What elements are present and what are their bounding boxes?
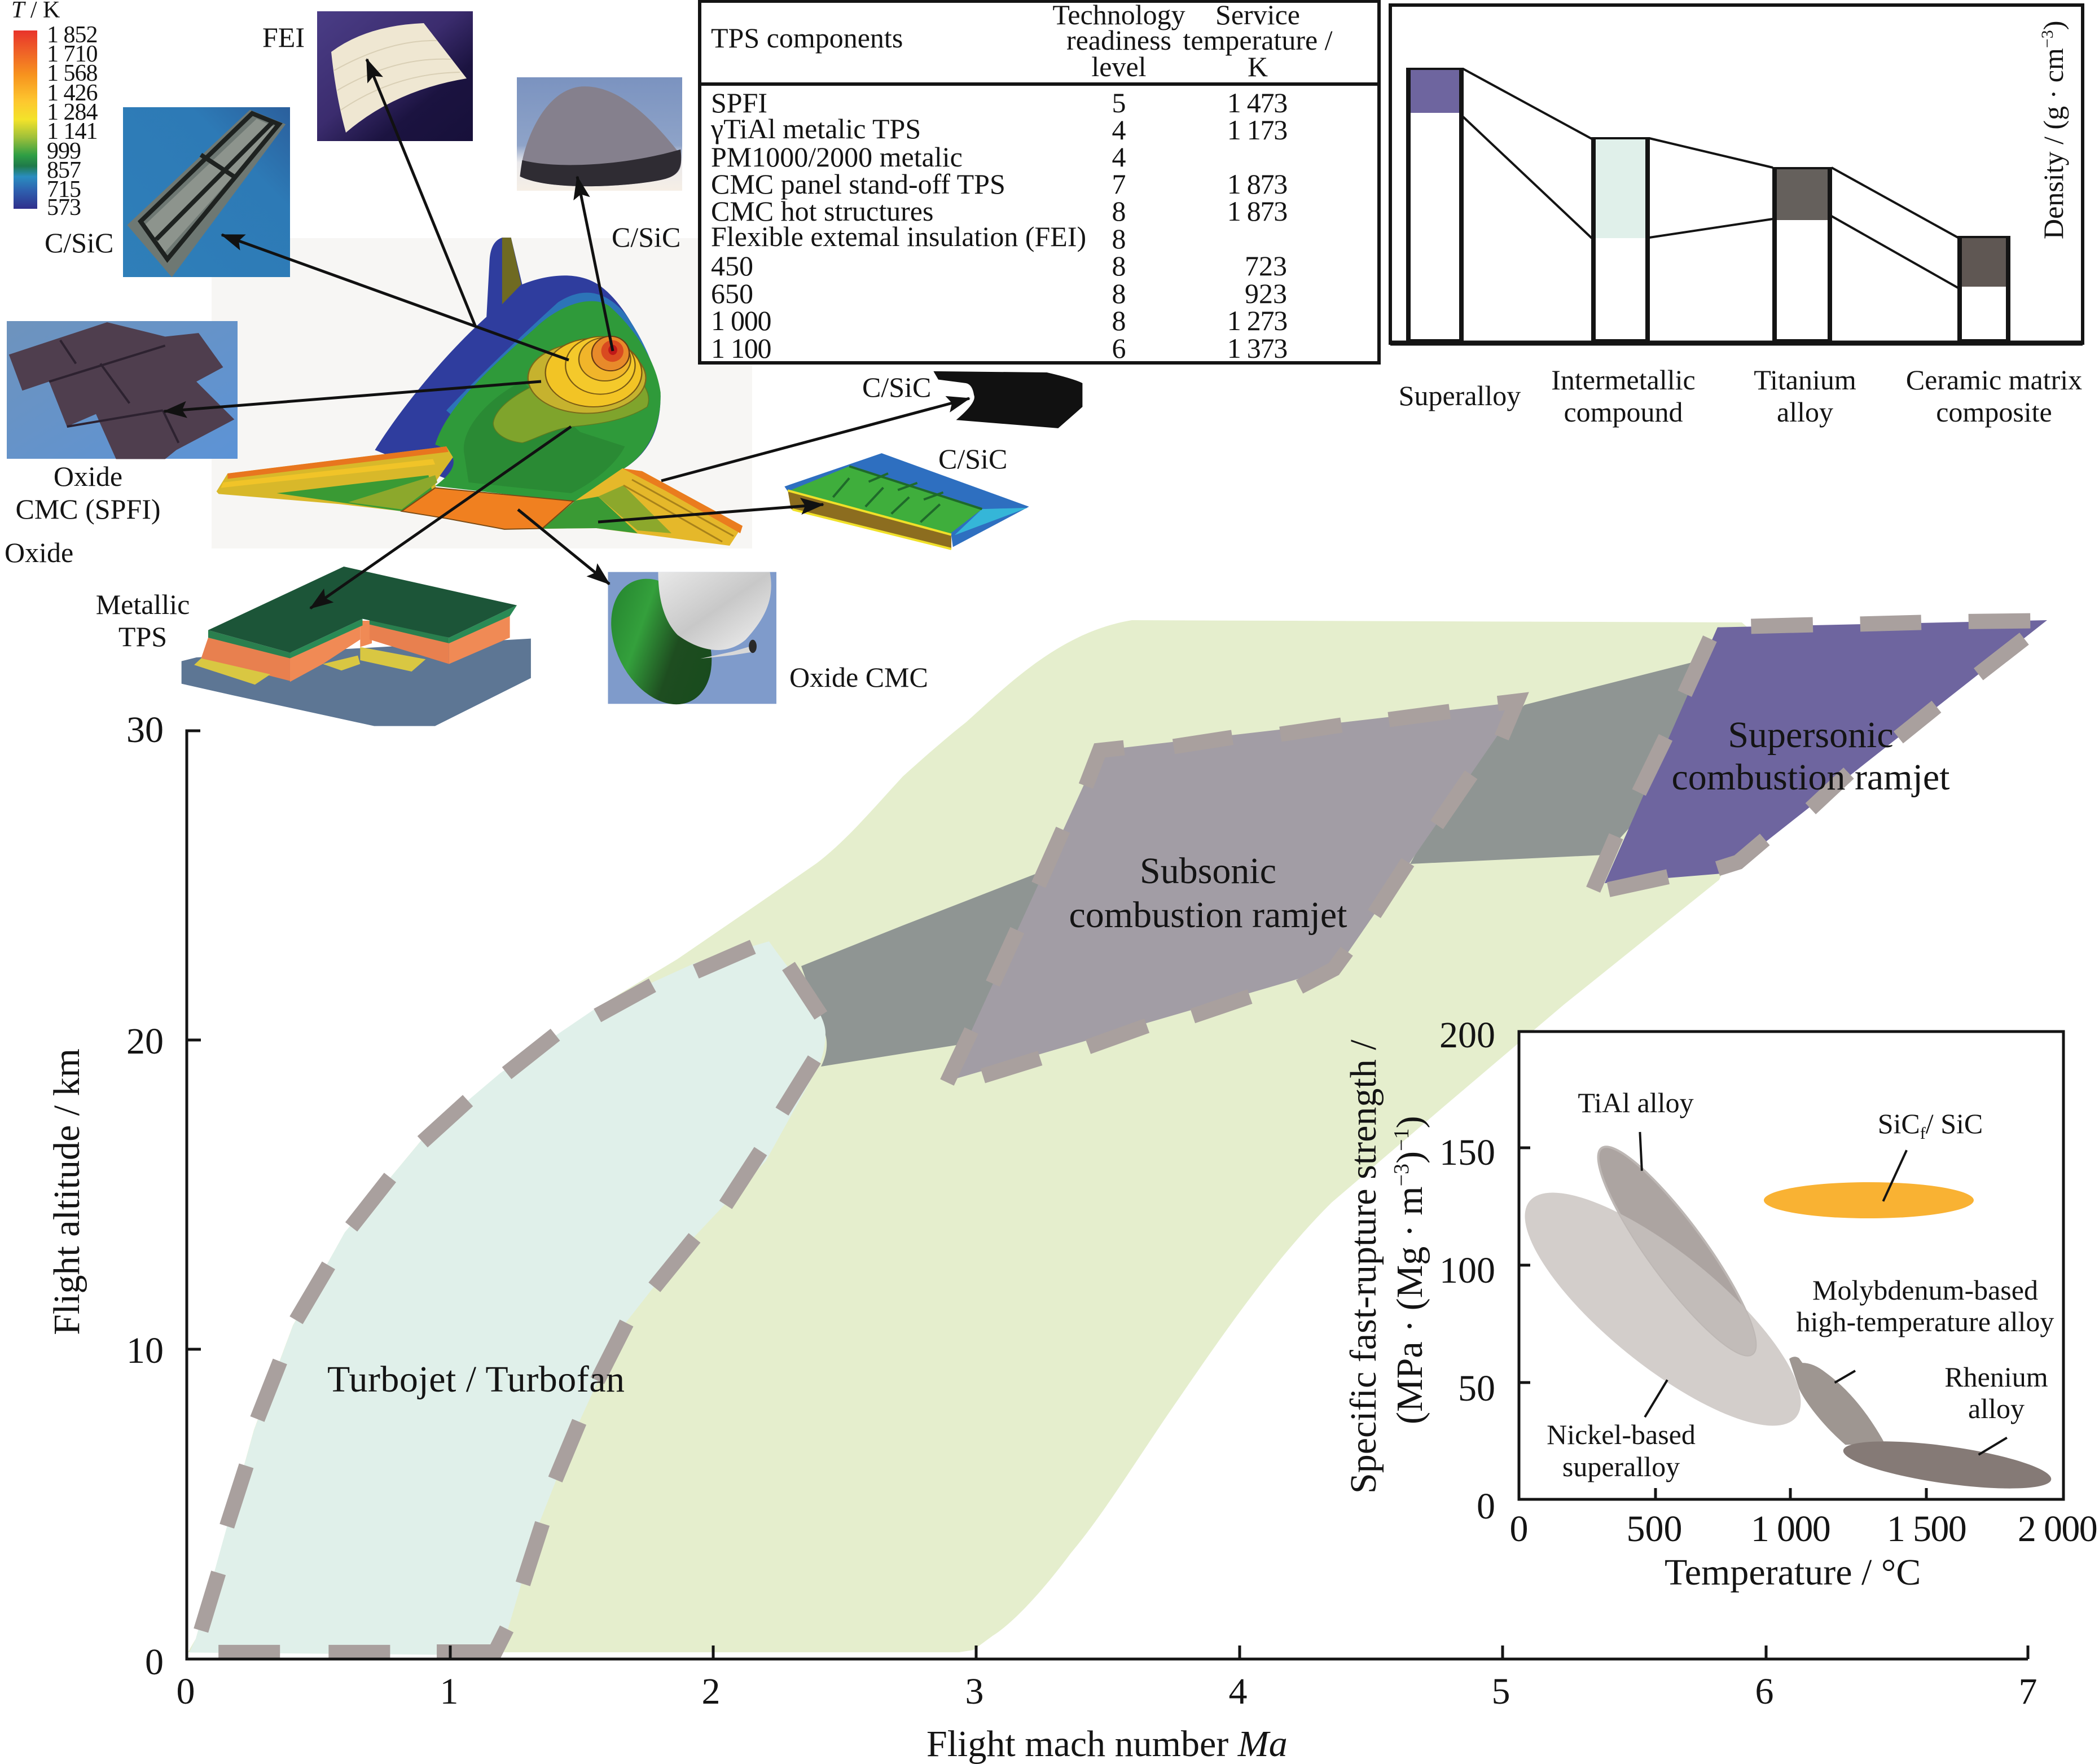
colour bar: [14, 30, 37, 209]
table column: technology readiness level: 8: [1112, 278, 1126, 309]
inset y tick labels: 100: [1439, 1250, 1495, 1291]
colour bar values: 857: [47, 157, 81, 183]
photo: C/SiC nose cap: [517, 77, 682, 191]
table column: service temperature: 923: [1245, 278, 1287, 309]
table column: technology readiness level: 8: [1112, 250, 1126, 282]
region label: supersonic combustion ramjet: Supersonic: [1728, 714, 1894, 756]
plane background speckle panel: [212, 238, 752, 548]
label: TiAl alloy: TiAl alloy: [1578, 1087, 1694, 1118]
label: nickel-based superalloy: superalloy: [1562, 1451, 1680, 1482]
table column: component names: 1 100: [711, 332, 771, 364]
inset y tick labels: [1439, 1015, 1495, 1527]
table column: service temperature: 1 873: [1227, 195, 1287, 227]
label: rhenium alloy: alloy: [1968, 1393, 2025, 1424]
density axis title: −3: [2038, 30, 2057, 48]
label: oxide CMC (SPFI): Oxide: [54, 460, 122, 492]
x axis title: Flight mach number Ma: [926, 1723, 1288, 1764]
ribbed grey panel: [127, 110, 286, 277]
y axis tick labels: [126, 709, 164, 1683]
arrow: to nose cap: [577, 177, 613, 351]
inset y axis title line 2: −1: [1390, 1129, 1413, 1151]
label: C/SiC wing panel: C/SiC: [938, 443, 1007, 475]
table column: component names: SPFI: [711, 87, 767, 119]
table column: service temperature: 1 273: [1227, 305, 1287, 336]
illustration: oxide CMC nozzle: [595, 571, 776, 712]
bar labels: compound: [1564, 396, 1683, 428]
inset y tick labels: 50: [1458, 1368, 1495, 1409]
table: TPS components: [700, 0, 1379, 364]
colour bar values: [47, 22, 98, 221]
table column: service temperature: 1 173: [1227, 114, 1287, 146]
bar: superalloy: [1408, 70, 1461, 341]
table header: temperature /: [1183, 24, 1333, 56]
table column: service temperature: 1 473: [1227, 87, 1287, 119]
table column: component names: γTiAl metalic TPS: [710, 113, 921, 144]
inset y axis title line 2: −3: [1390, 1164, 1413, 1186]
inset x tick labels: 0: [1510, 1508, 1528, 1550]
inset y axis title line 2: ): [1389, 1116, 1430, 1129]
bar labels: Superalloy: [1399, 380, 1521, 411]
table column: component names: CMC hot structures: [711, 195, 933, 227]
colour bar values: 1 568: [47, 60, 97, 86]
table column: component names: [710, 87, 1086, 364]
table column: service temperature: [1227, 87, 1287, 364]
connecting range lines: [1463, 69, 1958, 288]
inset y axis title line 1: Specific fast-rupture strength /: [1343, 1039, 1384, 1494]
bar labels: composite: [1936, 396, 2052, 428]
table header: [711, 0, 1333, 82]
axes and ticks: [187, 731, 2028, 1659]
inset x tick labels: 500: [1626, 1508, 1683, 1550]
bar labels: alloy: [1777, 396, 1833, 428]
table column: technology readiness level: 6: [1112, 332, 1126, 364]
x axis tick labels: 6: [1755, 1671, 1774, 1712]
inset chart: specific strength vs temperature: [1343, 1015, 2097, 1593]
inset x axis title: Temperature / °C: [1665, 1552, 1921, 1593]
table column: component names: 650: [711, 278, 753, 309]
colour bar values: 715: [47, 177, 81, 203]
arrow: to SPFI tiles: [164, 381, 541, 411]
label: SiCf/SiC: f: [1920, 1124, 1926, 1143]
bar labels: Titanium: [1754, 364, 1856, 396]
photo: flexible external insulation panel: [317, 11, 473, 141]
table column: service temperature: 1 373: [1227, 332, 1287, 364]
x axis tick labels: 7: [2019, 1671, 2037, 1712]
illustration: C/SiC wing panel: [784, 453, 1029, 550]
x axis tick labels: 4: [1229, 1671, 1247, 1712]
label: nickel-based superalloy: Nickel-based: [1547, 1419, 1696, 1450]
bar labels: Intermetallic: [1551, 364, 1696, 396]
table column: component names: PM1000/2000 metalic: [711, 141, 963, 173]
inset y axis title line 2: ): [1389, 1151, 1430, 1164]
table column: technology readiness level: 5: [1112, 87, 1126, 119]
illustration: metallic TPS block: [182, 567, 531, 726]
arrow: to FEI panel: [367, 59, 475, 326]
temperature colour scale: [11, 0, 98, 221]
inset ticks: [1519, 1148, 1926, 1499]
table column: technology readiness level: 8: [1112, 195, 1126, 227]
bar: titanium alloy: [1775, 169, 1830, 341]
label: metallic TPS: Metallic: [96, 589, 190, 620]
table column: technology readiness level: 4: [1112, 141, 1126, 173]
table column: component names: Flexible extemal insulation (FEI): [711, 221, 1086, 252]
y axis tick labels: 10: [126, 1330, 164, 1371]
shape: molybdenum-based alloy: [1789, 1357, 1885, 1445]
table header: readiness: [1066, 24, 1171, 56]
illustration: black C/SiC leading edge: [933, 371, 1082, 428]
label: rhenium alloy: Rhenium: [1944, 1361, 2048, 1393]
label: C/SiC panel: C/SiC: [45, 227, 113, 258]
inset x tick labels: 2 000: [2018, 1508, 2097, 1550]
inset y axis title line 2: (MPa · (Mg · m: [1389, 1186, 1430, 1424]
curved white insulation tile: [331, 23, 467, 133]
arrow: to metallic TPS: [310, 427, 571, 608]
ellipse: TiAl alloy: [1597, 1146, 1757, 1357]
table header: TPS components: [711, 22, 903, 54]
inset x tick labels: 1 500: [1887, 1508, 1966, 1550]
label: SiCf/SiC: SiC: [1878, 1108, 1920, 1139]
colour bar values: 1 141: [47, 119, 97, 144]
region label: supersonic combustion ramjet: combustion ramjet: [1671, 757, 1950, 798]
bar labels: Ceramic matrix: [1906, 364, 2082, 396]
colour bar values: 1 284: [47, 99, 98, 125]
header rule: [700, 82, 1379, 86]
inset x tick labels: [1510, 1508, 2097, 1550]
table column: technology readiness level: 8: [1112, 305, 1126, 336]
x axis tick labels: 3: [965, 1671, 984, 1712]
dashed outline: turbojet region: [201, 947, 821, 1652]
arrow: to wing panel: [598, 504, 823, 522]
region label: subsonic combustion ramjet: combustion ramjet: [1069, 894, 1347, 936]
inset y tick labels: 0: [1477, 1486, 1495, 1527]
label: molybdenum-based high-temperature alloy: high-temperature alloy: [1797, 1306, 2054, 1337]
colour bar values: 1 852: [47, 22, 97, 48]
vehicle right wing: [542, 468, 743, 546]
x axis tick labels: 5: [1492, 1671, 1510, 1712]
vehicle fuselage and tail fin: [375, 238, 661, 502]
inset plot frame: [1519, 1032, 2063, 1499]
subsonic combustion ramjet region: [948, 702, 1521, 1081]
label: oxide CMC: Oxide CMC: [789, 661, 928, 693]
thermal map of hypersonic vehicle: [217, 238, 743, 546]
table column: technology readiness level: 4: [1112, 114, 1126, 146]
photo: C/SiC panel: [123, 107, 290, 277]
label: FEI: FEI: [262, 21, 305, 53]
label: C/SiC leading edge: C/SiC: [862, 371, 931, 403]
arrow: to C/SiC panel: [222, 235, 569, 360]
inset y tick labels: 200: [1439, 1015, 1495, 1056]
density axis title: Density / (g · cm: [2037, 48, 2069, 239]
inset x tick labels: 1 000: [1751, 1508, 1830, 1550]
main flight envelope chart: [46, 620, 2047, 1764]
dashed outline: supersonic ramjet region: [1593, 621, 2030, 890]
label: SiCf/SiC: / SiC: [1926, 1108, 1983, 1139]
inset y tick labels: 150: [1439, 1132, 1495, 1173]
vehicle belly hot zone: [402, 488, 573, 529]
green flight envelope area: [188, 620, 1806, 1652]
ellipse: rhenium alloy: [1841, 1432, 2054, 1498]
table column: component names: 1 000: [711, 305, 771, 336]
density axis title: ): [2037, 21, 2069, 30]
label: oxide: Oxide: [5, 537, 73, 568]
arrows from vehicle to components: [164, 59, 969, 608]
dark band: [520, 150, 681, 186]
y axis tick labels: 20: [126, 1021, 164, 1062]
grey transition band: ramjet to scramjet: [1410, 661, 1715, 864]
table frame: [700, 1, 1379, 363]
table header: K: [1248, 51, 1268, 82]
colour bar values: 1 426: [47, 80, 97, 106]
bar: intermetallic compound: [1593, 139, 1648, 341]
supersonic combustion ramjet region: [1605, 620, 2047, 883]
label: oxide CMC (SPFI): CMC (SPFI): [15, 493, 161, 525]
table header: level: [1091, 51, 1147, 82]
photo: SPFI oxide CMC tiles: [7, 321, 238, 459]
y axis tick labels: 30: [126, 709, 164, 751]
grey transition band: turbine to ramjet: [801, 874, 1072, 1067]
table column: technology readiness level: 8: [1112, 223, 1126, 254]
ellipse: SiCf/SiC: [1764, 1182, 1974, 1218]
y axis tick labels: 0: [145, 1642, 164, 1683]
table column: technology readiness level: [1112, 87, 1126, 364]
label: C/SiC nose: C/SiC: [612, 221, 680, 253]
colour bar values: 573: [47, 195, 81, 221]
x axis tick labels: 1: [440, 1671, 458, 1712]
chart frame: [1390, 5, 2083, 343]
ellipse: nickel-based superalloy: [1494, 1157, 1832, 1461]
label: molybdenum-based high-temperature alloy: Molybdenum-based: [1812, 1274, 2038, 1306]
table column: service temperature: 723: [1245, 250, 1287, 282]
x axis tick labels: 2: [702, 1671, 720, 1712]
component labels around vehicle: [5, 21, 1007, 693]
colour bar values: 999: [47, 138, 81, 164]
bar labels: [1399, 364, 2082, 428]
bar: ceramic matrix composite: [1960, 238, 2008, 341]
turbojet and turbofan region: [190, 941, 825, 1655]
dashed outline: subsonic ramjet region: [947, 701, 1517, 1082]
leader lines: [1640, 1132, 2007, 1455]
density bar chart: [1390, 5, 2083, 428]
region label: turbojet / turbofan: Turbojet / Turbofan: [327, 1359, 625, 1400]
table column: component names: 450: [711, 250, 753, 282]
x axis tick labels: 0: [176, 1671, 195, 1712]
table column: service temperature: 1 873: [1227, 168, 1287, 200]
label: metallic TPS: TPS: [118, 621, 167, 652]
colour bar values: 1 710: [47, 41, 97, 67]
vehicle left wing: [217, 446, 453, 511]
table column: technology readiness level: 7: [1112, 168, 1126, 200]
y axis title: Flight altitude / km: [46, 1048, 87, 1335]
x axis tick labels: [176, 1671, 2037, 1712]
arrow: to oxide CMC nozzle: [518, 510, 609, 584]
dome: [520, 86, 681, 186]
region label: subsonic combustion ramjet: Subsonic: [1140, 850, 1276, 892]
arrow: to leading edge: [661, 398, 969, 481]
table column: component names: CMC panel stand-off TPS: [711, 168, 1005, 200]
tile grid: [334, 41, 460, 110]
